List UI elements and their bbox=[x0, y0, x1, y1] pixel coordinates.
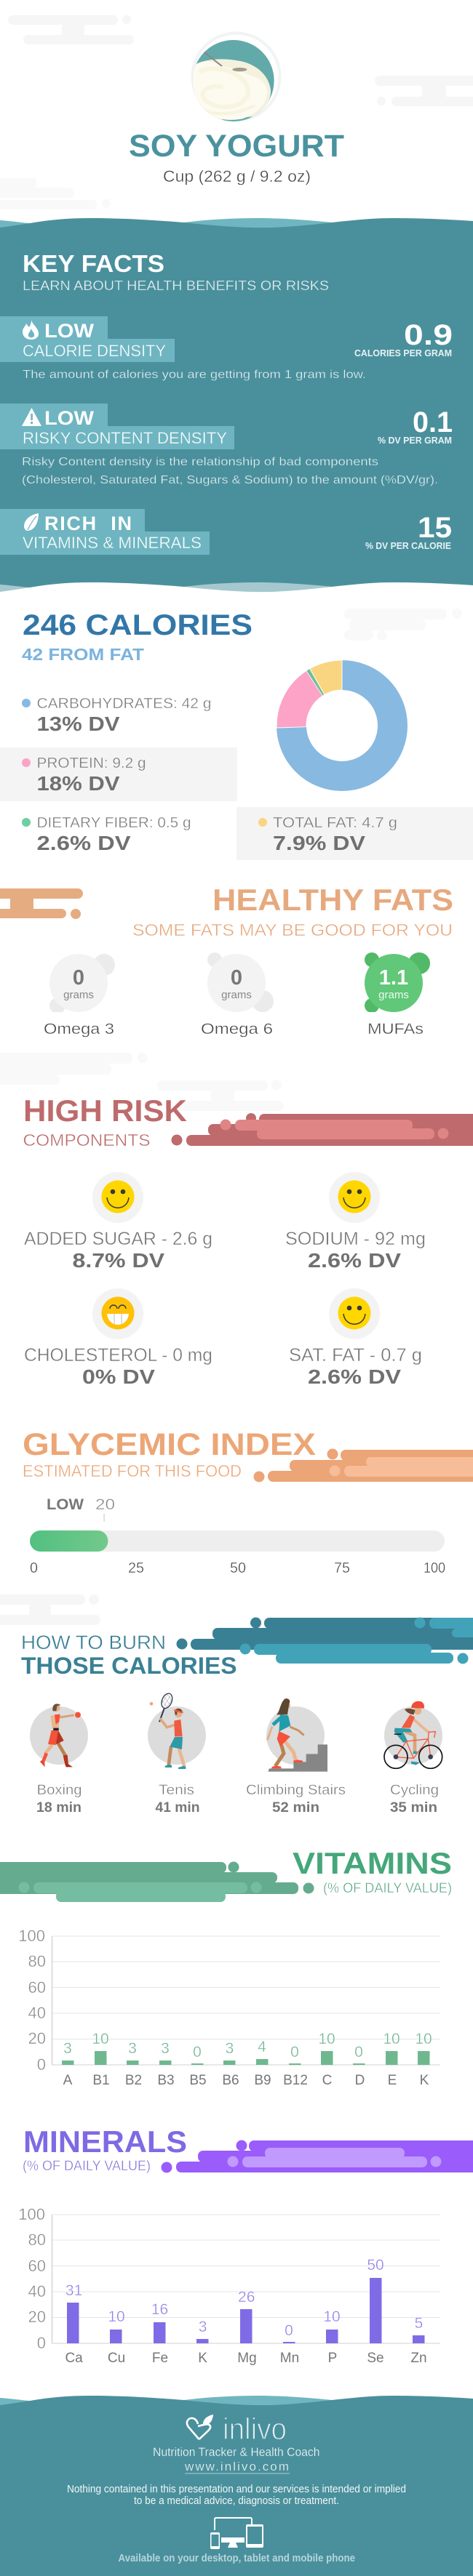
website link: www.inlivo.com bbox=[184, 2460, 289, 2473]
panel: how to burn those calories bbox=[21, 1617, 473, 1815]
ribbon: healthy fats bbox=[0, 888, 83, 919]
icon: flame bbox=[23, 320, 39, 340]
legend: dietary fiber bbox=[22, 815, 191, 854]
panel: key facts bbox=[0, 218, 473, 604]
bar chart: vitamins: D bbox=[355, 2073, 365, 2088]
disclaimer bbox=[67, 2483, 406, 2507]
bar chart: minerals: 5 bbox=[415, 2315, 423, 2332]
tagline: Nutrition Tracker & Health Coach bbox=[153, 2445, 320, 2459]
badge: MUFAs: 1.1 bbox=[379, 966, 408, 990]
bar chart: minerals: Mn bbox=[280, 2351, 299, 2366]
fact: risky content density: % DV PER GRAM bbox=[378, 435, 452, 446]
activity: tennis: Tenis bbox=[159, 1783, 194, 1798]
panel: vitamins bbox=[0, 1846, 452, 2088]
panel: footer bbox=[0, 2396, 473, 2576]
fact: calorie density: The amount of calories you are getting from 1 gram is low. bbox=[23, 369, 366, 381]
bar chart: vitamins: 0 bbox=[37, 2055, 46, 2074]
gauge scale: 100 bbox=[424, 1560, 445, 1576]
item: cholesterol: CHOLESTEROL - 0 mg bbox=[24, 1345, 212, 1365]
bar chart: vitamins: 60 bbox=[28, 1978, 46, 1997]
subheading: SOME FATS MAY BE GOOD FOR YOU bbox=[132, 920, 453, 939]
badge: omega 3: 0 bbox=[73, 966, 84, 990]
legend: total fat bbox=[258, 815, 397, 854]
activity: climbing stairs: 52 min bbox=[272, 1800, 319, 1815]
ribbon: burn bbox=[176, 1617, 473, 1664]
bar chart: minerals: 100 bbox=[18, 2205, 45, 2223]
bar chart: minerals: K bbox=[198, 2351, 207, 2366]
fact: risky content density: 0.1 bbox=[413, 406, 453, 438]
bar chart: minerals: 10 bbox=[323, 2308, 341, 2325]
heading: VITAMINS bbox=[293, 1846, 452, 1880]
fact: calorie density: 0.9 bbox=[404, 319, 453, 351]
bar chart: vitamins: B12 bbox=[283, 2073, 308, 2088]
bar chart: minerals: Mg bbox=[237, 2351, 257, 2366]
panel: minerals bbox=[18, 2124, 473, 2366]
bar chart: minerals: 26 bbox=[238, 2289, 255, 2306]
bar chart: vitamins: 4 bbox=[258, 2039, 266, 2055]
bar chart: vitamins: E bbox=[388, 2073, 397, 2088]
bar chart: vitamins: 3 bbox=[161, 2040, 170, 2057]
title: SOY YOGURT bbox=[129, 129, 344, 164]
badge: MUFAs: MUFAs bbox=[367, 1021, 424, 1038]
bar chart: minerals: 0 bbox=[37, 2334, 46, 2352]
bar chart: vitamins: B3 bbox=[157, 2073, 175, 2088]
bar chart: vitamins: 0 bbox=[193, 2044, 202, 2061]
availability note: Available on your desktop, tablet and mobile phone bbox=[118, 2552, 355, 2564]
bar chart: minerals: Ca bbox=[65, 2351, 83, 2366]
fact: calorie density: LOW bbox=[44, 320, 95, 342]
bar chart: vitamins: 3 bbox=[128, 2040, 137, 2057]
item: sodium: SODIUM - 92 mg bbox=[285, 1229, 426, 1249]
bar chart: minerals: 16 bbox=[151, 2301, 168, 2318]
fact: rich in vitamins and minerals bbox=[0, 509, 452, 555]
heading line 2: THOSE CALORIES bbox=[21, 1653, 237, 1679]
icon: cyclist bbox=[384, 1701, 442, 1768]
bar chart: vitamins: 10 bbox=[318, 2031, 335, 2047]
bar chart: vitamins: B6 bbox=[222, 2073, 239, 2088]
bar chart: vitamins: K bbox=[420, 2073, 429, 2088]
legend: protein: 18% DV bbox=[36, 772, 120, 795]
bar chart: vitamins: 10 bbox=[383, 2031, 400, 2047]
gauge value bbox=[47, 1496, 115, 1522]
bar chart: vitamins: B5 bbox=[189, 2073, 207, 2088]
badge: omega 3: grams bbox=[63, 989, 94, 1001]
activity: cycling bbox=[384, 1701, 442, 1815]
icon: warning triangle bbox=[22, 408, 41, 426]
item: sodium: 2.6% DV bbox=[308, 1249, 401, 1272]
bar chart: minerals: 31 bbox=[65, 2282, 82, 2299]
gauge scale: 75 bbox=[334, 1560, 350, 1576]
subheading: (% OF DAILY VALUE) bbox=[323, 1881, 452, 1896]
fact: calorie density: CALORIE DENSITY bbox=[23, 342, 166, 360]
badge: omega 6: 0 bbox=[231, 966, 242, 990]
item: added sugar bbox=[24, 1172, 212, 1272]
item: added sugar: ADDED SUGAR - 2.6 g bbox=[24, 1229, 212, 1249]
subheading: (% OF DAILY VALUE) bbox=[23, 2159, 151, 2174]
ribbon: vitamins bbox=[0, 1861, 314, 1902]
icon: tennis player bbox=[150, 1692, 186, 1769]
bar chart: vitamins: 20 bbox=[28, 2029, 46, 2047]
bar chart: minerals: 0 bbox=[285, 2322, 293, 2339]
heading line 1: HOW TO BURN bbox=[21, 1632, 166, 1653]
fact: risky content density: Risky Content density is the relationship of bad components bbox=[22, 456, 378, 468]
subheading: 42 FROM FAT bbox=[22, 645, 144, 664]
heading: HEALTHY FATS bbox=[212, 883, 453, 917]
bar chart: vitamins bbox=[18, 1927, 440, 2088]
bar chart: vitamins: 80 bbox=[28, 1952, 46, 1970]
badge: omega 6: grams bbox=[221, 989, 252, 1001]
bar chart: vitamins: 10 bbox=[415, 2031, 432, 2047]
bar chart: vitamins: 3 bbox=[63, 2040, 72, 2057]
header: food photo bbox=[191, 32, 281, 122]
legend: carbohydrates bbox=[22, 696, 211, 735]
donut chart bbox=[277, 660, 393, 777]
badge: MUFAs: grams bbox=[378, 989, 409, 1001]
bar chart: vitamins: B1 bbox=[92, 2073, 110, 2088]
fact: rich in vitamins and minerals: VITAMINS & MINERALS bbox=[23, 534, 202, 552]
icon: leaf bbox=[24, 513, 39, 531]
disclaimer: Nothing contained in this presentation and our services is intended or implied bbox=[67, 2483, 406, 2495]
badge: omega 3 bbox=[44, 954, 115, 1038]
subheading: ESTIMATED FOR THIS FOOD bbox=[23, 1461, 242, 1480]
gauge value: 20 bbox=[95, 1496, 115, 1513]
bar chart: minerals: Zn bbox=[410, 2351, 427, 2366]
bar chart: minerals: 3 bbox=[199, 2319, 207, 2335]
legend: dietary fiber: DIETARY FIBER: 0.5 g bbox=[36, 815, 191, 831]
badge: MUFAs bbox=[365, 952, 430, 1038]
bar chart: minerals: 50 bbox=[367, 2257, 384, 2274]
bar chart: vitamins: C bbox=[322, 2073, 332, 2088]
bar chart: vitamins: 10 bbox=[92, 2031, 109, 2047]
disclaimer: to be a medical advice, diagnosis or treatment. bbox=[134, 2495, 339, 2507]
legend: carbohydrates: 13% DV bbox=[36, 713, 120, 735]
bar chart: vitamins: 0 bbox=[290, 2044, 299, 2061]
activity: cycling: 35 min bbox=[390, 1800, 437, 1815]
activity: boxing: 18 min bbox=[36, 1800, 82, 1815]
bar chart: minerals: 60 bbox=[28, 2257, 46, 2275]
bar chart: vitamins: B9 bbox=[254, 2073, 271, 2088]
activity: boxing bbox=[30, 1704, 88, 1815]
activity: cycling: Cycling bbox=[390, 1783, 439, 1798]
gauge bar bbox=[30, 1530, 445, 1552]
bar chart: minerals: 20 bbox=[28, 2308, 46, 2326]
heading: GLYCEMIC INDEX bbox=[23, 1427, 316, 1462]
legend: protein: PROTEIN: 9.2 g bbox=[36, 755, 146, 771]
bar chart: minerals: Fe bbox=[152, 2351, 168, 2366]
fact: rich in vitamins and minerals: % DV PER CALORIE bbox=[365, 540, 451, 551]
fact: calorie density bbox=[0, 316, 453, 381]
logo bbox=[187, 2412, 287, 2446]
ribbon: minerals bbox=[162, 2140, 473, 2172]
fact: calorie density: CALORIES PER GRAM bbox=[354, 348, 452, 358]
heading: MINERALS bbox=[23, 2124, 187, 2159]
icon: woman climbing stairs bbox=[267, 1698, 327, 1772]
activity: climbing stairs: Climbing Stairs bbox=[246, 1783, 346, 1798]
activity: climbing stairs bbox=[246, 1698, 346, 1815]
gauge scale: 50 bbox=[230, 1560, 246, 1576]
bar chart: vitamins: 100 bbox=[18, 1927, 45, 1945]
heading: 246 CALORIES bbox=[23, 609, 253, 641]
bar chart: minerals: 40 bbox=[28, 2282, 46, 2300]
item: saturated fat: SAT. FAT - 0.7 g bbox=[289, 1345, 422, 1365]
bar chart: vitamins: 3 bbox=[226, 2040, 234, 2057]
item: added sugar: 8.7% DV bbox=[73, 1249, 164, 1272]
bar chart: vitamins: 0 bbox=[354, 2044, 363, 2061]
badge: omega 6: Omega 6 bbox=[201, 1021, 273, 1038]
fact: risky content density: (Cholesterol, Saturated Fat, Sugars & Sodium) to the amount (%DV/gr). bbox=[22, 474, 438, 486]
gauge value: LOW bbox=[47, 1496, 84, 1513]
item: saturated fat: 2.6% DV bbox=[308, 1365, 401, 1388]
bar chart: vitamins: A bbox=[63, 2073, 73, 2088]
legend: total fat: TOTAL FAT: 4.7 g bbox=[273, 815, 397, 831]
fact: risky content density bbox=[0, 404, 453, 486]
fact: risky content density: RISKY CONTENT DENSITY bbox=[23, 429, 227, 447]
subheading: LEARN ABOUT HEALTH BENEFITS OR RISKS bbox=[23, 278, 329, 293]
panel: calories bbox=[0, 609, 473, 860]
gauge scale: 0 bbox=[30, 1560, 38, 1576]
fact: risky content density: LOW bbox=[44, 407, 95, 429]
subheading: COMPONENTS bbox=[23, 1131, 150, 1149]
bar chart: minerals: Cu bbox=[108, 2351, 125, 2366]
logo: inlivo bbox=[223, 2412, 287, 2446]
fact: rich in vitamins and minerals: RICH IN bbox=[44, 513, 132, 534]
legend: dietary fiber: 2.6% DV bbox=[36, 832, 131, 854]
badge: omega 6 bbox=[201, 952, 274, 1038]
gauge scale bbox=[30, 1560, 445, 1576]
bar chart: vitamins: B2 bbox=[125, 2073, 142, 2088]
badge: omega 3: Omega 3 bbox=[44, 1021, 114, 1038]
bar chart: minerals: 80 bbox=[28, 2231, 46, 2249]
fact: rich in vitamins and minerals: 15 bbox=[418, 512, 452, 544]
panel: high risk components bbox=[23, 1094, 473, 1388]
serving size: Cup (262 g / 9.2 oz) bbox=[163, 167, 311, 185]
item: saturated fat bbox=[289, 1288, 422, 1388]
gauge scale: 25 bbox=[128, 1560, 144, 1576]
panel: healthy fats bbox=[0, 883, 453, 1038]
legend: carbohydrates: CARBOHYDRATES: 42 g bbox=[36, 696, 211, 712]
ribbon: glycemic bbox=[253, 1448, 473, 1482]
item: sodium bbox=[285, 1172, 426, 1272]
bar chart: minerals: 10 bbox=[108, 2308, 125, 2325]
panel: glycemic index bbox=[23, 1427, 473, 1576]
activity: tennis bbox=[148, 1692, 206, 1815]
legend: total fat: 7.9% DV bbox=[273, 832, 365, 854]
icon: boxer bbox=[40, 1704, 81, 1767]
icon: devices bbox=[210, 2518, 263, 2549]
ribbon: high risk bbox=[172, 1113, 473, 1146]
heading: KEY FACTS bbox=[23, 250, 164, 277]
bar chart: vitamins: 40 bbox=[28, 2004, 46, 2022]
bar chart: minerals bbox=[18, 2205, 440, 2366]
bar chart: minerals: Se bbox=[367, 2351, 384, 2366]
bar chart: minerals: P bbox=[328, 2351, 337, 2366]
legend: protein bbox=[22, 755, 146, 795]
activity: boxing: Boxing bbox=[37, 1783, 82, 1798]
item: cholesterol: 0% DV bbox=[82, 1365, 155, 1388]
heading: HIGH RISK bbox=[23, 1094, 187, 1128]
item: cholesterol bbox=[24, 1288, 212, 1388]
activity: tennis: 41 min bbox=[156, 1800, 199, 1815]
